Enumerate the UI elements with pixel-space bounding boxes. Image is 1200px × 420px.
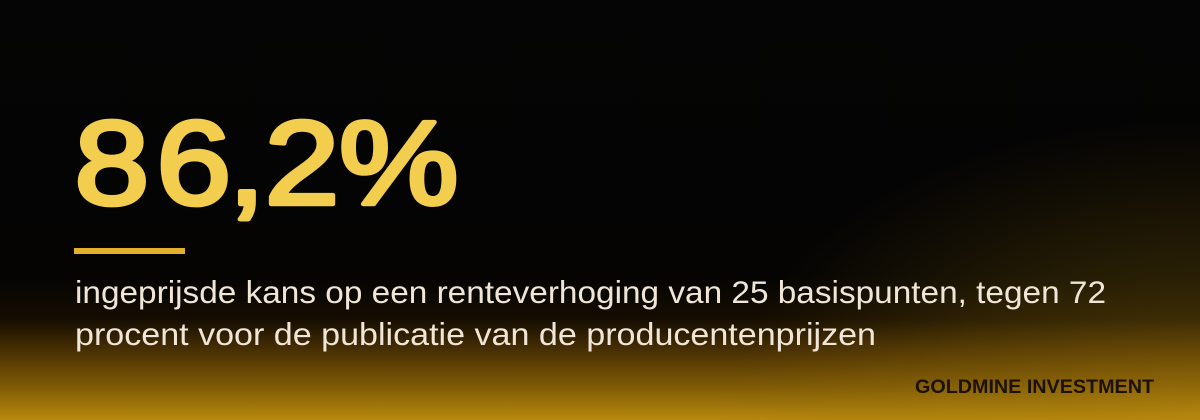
description text: ingeprijsde kans op een renteverhoging van 25 basispunten, tegen 72 xyxy=(75,274,1106,310)
headline figure: 86,2% xyxy=(74,96,459,229)
description text xyxy=(75,274,1106,352)
accent bar xyxy=(74,248,185,254)
brand label: GOLDMINE INVESTMENT xyxy=(915,376,1154,398)
description text: procent voor de publicatie van de producentenprijzen xyxy=(75,316,876,352)
